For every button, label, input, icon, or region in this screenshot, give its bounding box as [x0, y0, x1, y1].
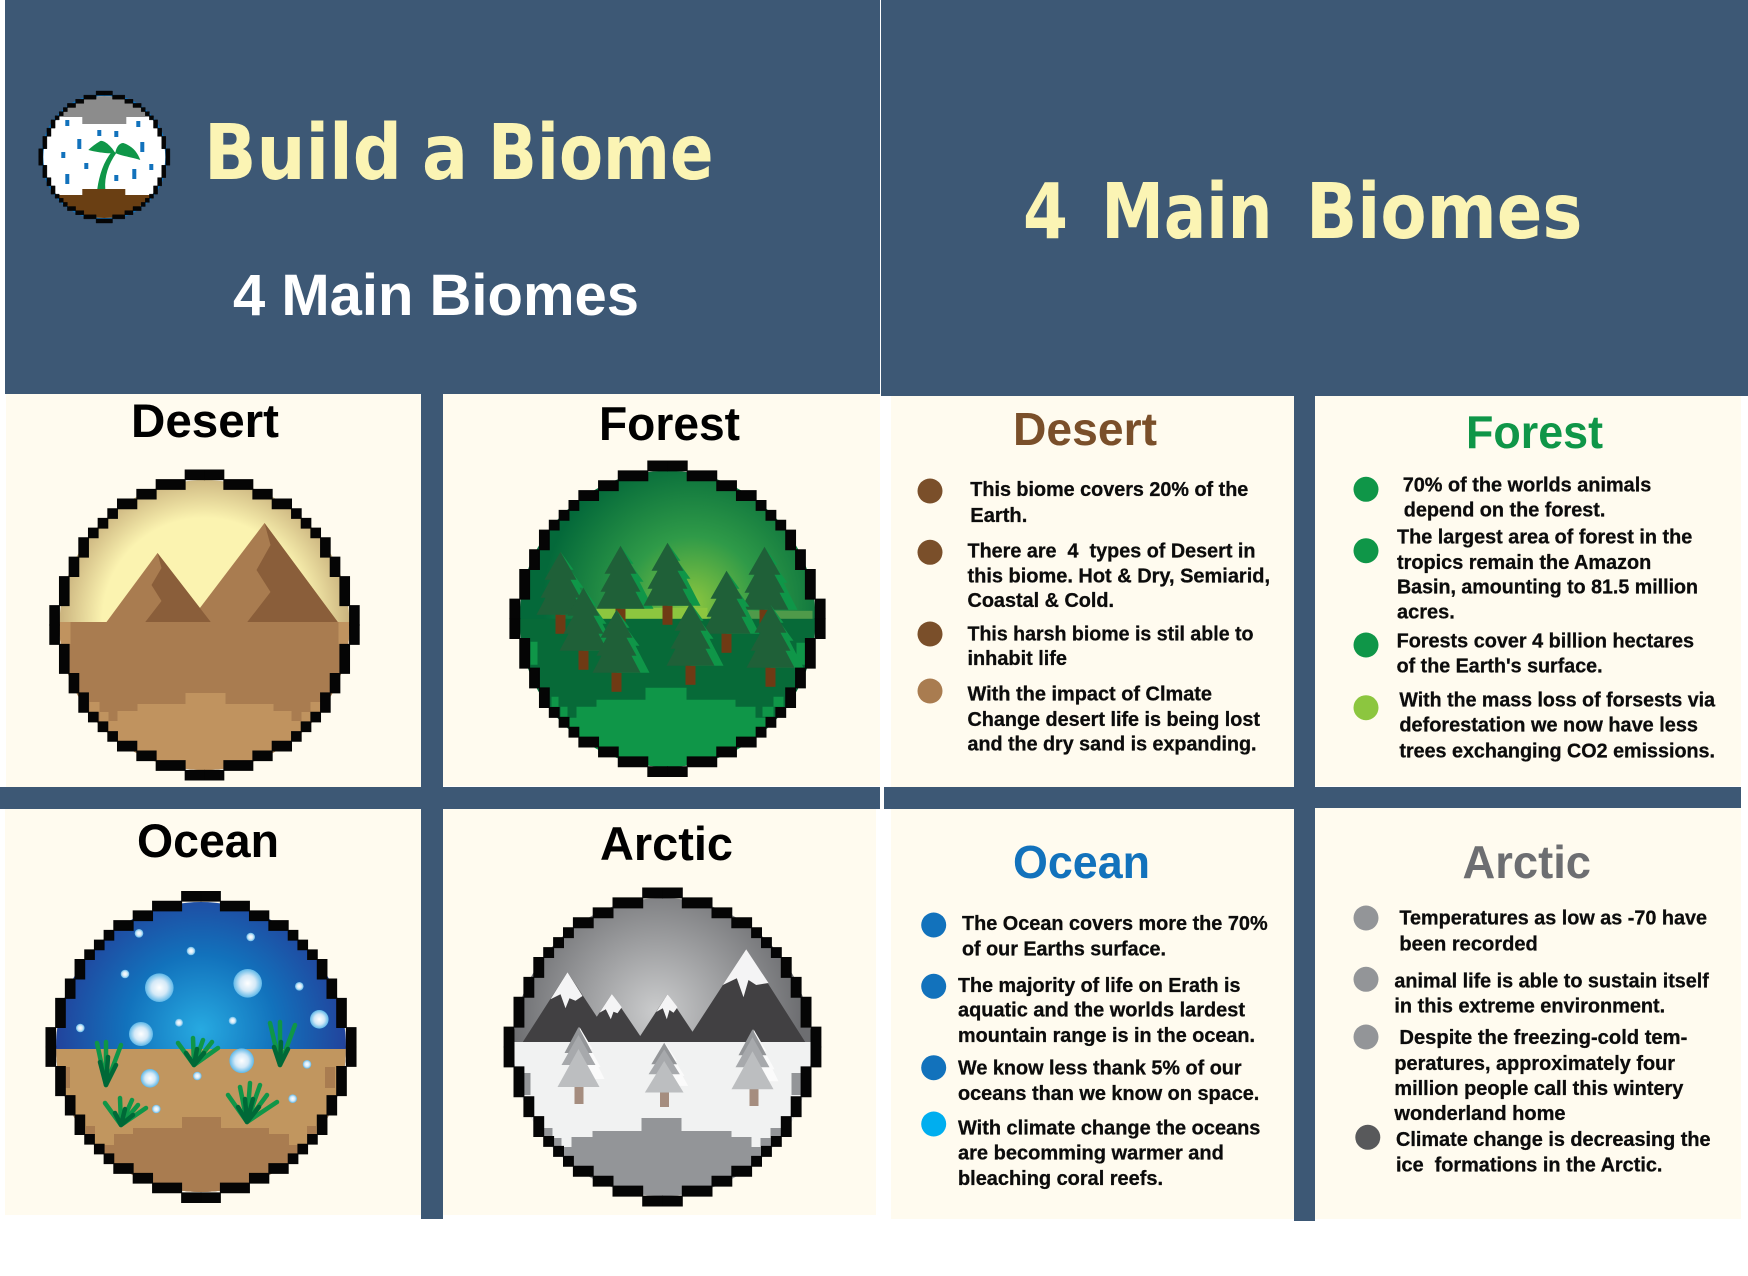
panel: arctic facts	[1315, 808, 1741, 1219]
text: ocean facts: The majority of life on Erath is	[958, 975, 1240, 997]
logo icon: sprout in rain	[38, 90, 170, 224]
text: forest facts: of the Earth's surface.	[1397, 656, 1603, 678]
text: ocean facts: are becomming warmer and	[958, 1143, 1224, 1165]
text: desert facts: and the dry sand is expanding.	[968, 734, 1256, 756]
text: arctic facts: Despite the freezing-cold tem-	[1399, 1027, 1687, 1049]
subtitle: 4 Main Biomes: 4 Main Biomes	[233, 263, 639, 328]
panel: forest facts	[1315, 396, 1741, 786]
text: ocean facts: of our Earths surface.	[962, 939, 1166, 961]
text: desert facts: There are 4 types of Desert in	[968, 541, 1256, 563]
text: ocean facts: With climate change the oceans	[958, 1118, 1260, 1140]
text: ocean facts: mountain range is in the ocean.	[958, 1025, 1255, 1047]
heading: Desert facts: Desert	[1013, 403, 1157, 455]
heading: Desert: Desert	[131, 394, 279, 447]
text: desert facts: With the impact of Clmate	[968, 684, 1212, 706]
panel: desert facts	[891, 396, 1294, 787]
text: ocean facts	[958, 913, 1268, 1190]
text: desert facts: Change desert life is being lost	[968, 709, 1260, 731]
text: forest facts: 70% of the worlds animals	[1403, 475, 1651, 497]
heading: Ocean facts: Ocean	[1013, 836, 1150, 888]
text: ocean facts: The Ocean covers more the 70%	[962, 913, 1268, 935]
panel: ocean illustration	[5, 809, 421, 1215]
text: arctic facts: Temperatures as low as -70 have	[1399, 907, 1707, 929]
heading: Arctic facts: Arctic	[1462, 836, 1591, 888]
text: ocean facts: We know less thank 5% of our	[958, 1058, 1242, 1080]
header panel: left	[5, 0, 880, 394]
panel: forest illustration	[443, 394, 880, 789]
panel: desert illustration	[6, 394, 421, 787]
divider bars	[0, 394, 1741, 1221]
bullets	[1354, 477, 1378, 720]
text: forest facts: acres.	[1397, 602, 1455, 624]
icon: ocean scene	[46, 891, 356, 1203]
text: arctic facts: peratures, approximately four	[1394, 1053, 1675, 1075]
text: arctic facts: wonderland home	[1393, 1103, 1566, 1125]
title: Build a Biome: Biome	[488, 109, 714, 198]
text: arctic facts: animal life is able to sustain itself	[1394, 971, 1709, 993]
text: desert facts	[968, 479, 1270, 756]
icon: desert scene	[50, 470, 359, 785]
text: arctic facts: ice formations in the Arctic.	[1396, 1155, 1662, 1177]
header panel: right	[881, 0, 1748, 396]
text: arctic facts: in this extreme environment.	[1394, 996, 1665, 1018]
heading: Arctic: Arctic	[600, 817, 733, 870]
title: Build a Biome: Build	[204, 109, 402, 198]
title: 4 Main Biomes (right): 4	[1023, 168, 1068, 257]
text: desert facts: inhabit life	[968, 648, 1067, 670]
text: desert facts: Earth.	[970, 505, 1027, 527]
text: forest facts: With the mass loss of forsests via	[1399, 690, 1716, 712]
icon: arctic scene	[504, 888, 821, 1206]
panel: arctic illustration	[443, 809, 876, 1215]
text: forest facts: depend on the forest.	[1404, 500, 1605, 522]
bullets	[921, 912, 946, 1136]
bullets	[918, 478, 942, 704]
panel: ocean facts	[891, 809, 1294, 1219]
text: arctic facts: Climate change is decreasing the	[1396, 1129, 1711, 1151]
text: forest facts: tropics remain the Amazon	[1397, 552, 1651, 574]
text: arctic facts: been recorded	[1399, 934, 1538, 956]
text: ocean facts: oceans than we know on space.	[958, 1083, 1259, 1105]
text: forest facts	[1397, 475, 1716, 762]
text: ocean facts: aquatic and the worlds lardest	[958, 1000, 1245, 1022]
icon: forest scene	[510, 461, 825, 789]
text: forest facts: Basin, amounting to 81.5 million	[1397, 577, 1698, 599]
title: Build a Biome: a	[422, 109, 468, 198]
text: forest facts: The largest area of forest in the	[1397, 527, 1692, 549]
bullets	[1354, 906, 1380, 1150]
text: desert facts: This harsh biome is stil able to	[968, 624, 1254, 646]
text: desert facts: This biome covers 20% of the	[970, 479, 1248, 501]
text: ocean facts: bleaching coral reefs.	[958, 1168, 1163, 1190]
heading: Forest facts: Forest	[1466, 406, 1603, 458]
text: forest facts: deforestation we now have less	[1399, 715, 1698, 737]
text: arctic facts	[1393, 907, 1711, 1177]
title: 4 Main Biomes (right): Main	[1101, 168, 1272, 257]
title: 4 Main Biomes (right): Biomes	[1306, 168, 1582, 257]
text: arctic facts: million people call this wintery	[1394, 1078, 1684, 1100]
text: desert facts: this biome. Hot & Dry, Semiarid,	[968, 566, 1270, 588]
text: forest facts: trees exchanging CO2 emissions.	[1399, 740, 1715, 762]
text: forest facts: Forests cover 4 billion hectares	[1397, 631, 1694, 653]
text: desert facts: Coastal & Cold.	[968, 590, 1114, 612]
heading: Forest: Forest	[599, 397, 740, 450]
heading: Ocean: Ocean	[137, 814, 279, 867]
